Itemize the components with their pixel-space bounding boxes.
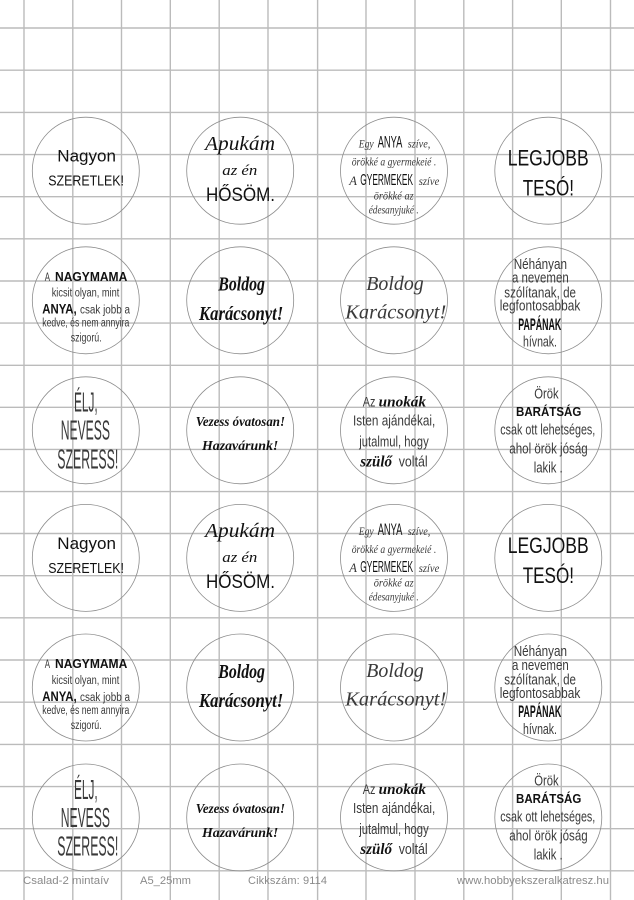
badge: Az unokák: szülő	[359, 454, 393, 471]
repeat badge: Apukám az én hősöm: HŐSÖM.	[206, 571, 275, 593]
badge: Néhányan a nevemen: Néhányan	[514, 256, 567, 273]
repeat badge: Egy anya szíve: ANYA	[378, 520, 403, 539]
repeat badge: A nagymama: NAGYMAMA	[55, 656, 128, 671]
badge: Néhányan a nevemen: legfontosabbak	[500, 298, 581, 315]
badge: Legjobb tesó: TESÓ!	[523, 176, 574, 201]
badge: Egy anya szíve: ANYA	[378, 133, 403, 152]
repeat badge: Egy anya szíve: örökké az	[374, 576, 414, 590]
repeat badge: Boldog Karácsonyt (brush): Boldog	[218, 661, 265, 683]
badge: Legjobb tesó	[495, 117, 602, 224]
repeat badge: A nagymama: szigorú.	[71, 720, 102, 732]
badge: Egy anya szíve	[340, 117, 448, 224]
repeat badge: A nagymama: A	[45, 657, 50, 671]
badge: Egy anya szíve: örökké a gyermekeié .	[352, 155, 436, 169]
badge: Néhányan a nevemen: szólítanak, de	[504, 284, 576, 301]
badge: Egy anya szíve: örökké az	[374, 188, 414, 202]
footer text: A5_25mm	[140, 875, 191, 887]
badge: Élj, nevess, szeress: NEVESS	[61, 415, 110, 446]
repeat badge: Egy anya szíve	[340, 504, 448, 611]
badge: Egy anya szíve: Egy	[358, 137, 374, 151]
badge: A nagymama: kedve, és nem annyira	[42, 318, 130, 330]
repeat badge: Néhányan a nevemen: PAPÁNAK	[518, 702, 562, 721]
badge: A nagymama: NAGYMAMA	[55, 269, 128, 284]
repeat badge: Legjobb tesó: LEGJOBB	[508, 533, 589, 558]
badge: Apukám az én hősöm	[187, 117, 294, 224]
repeat badge: Egy anya szíve: szíve	[419, 561, 440, 575]
badge: Néhányan a nevemen: hívnak.	[523, 334, 557, 351]
badge: Egy anya szíve: GYERMEKEK	[360, 172, 413, 189]
repeat badge: Egy anya szíve: édesanyjuké .	[369, 590, 419, 604]
repeat badge: Egy anya szíve: szíve,	[408, 524, 430, 538]
badge: Az unokák	[340, 377, 448, 484]
badge: Nagyon szeretlek	[32, 117, 139, 224]
repeat badge: Örök barátság: BARÁTSÁG	[516, 791, 581, 806]
badge: A nagymama: csak jobb a	[80, 305, 131, 317]
repeat badge: Néhányan a nevemen	[495, 634, 602, 741]
repeat badge: Néhányan a nevemen: a nevemen	[512, 657, 569, 674]
repeat badge: Az unokák: unokák	[379, 782, 427, 798]
badge: Az unokák: Az	[363, 394, 375, 410]
repeat badge: Boldog Karácsonyt (script)	[340, 634, 448, 741]
badge: Vezess óvatosan: Vezess óvatosan!	[196, 415, 285, 430]
badge: Élj, nevess, szeress: ÉLJ,	[74, 387, 98, 418]
repeat badge: Egy anya szíve: A	[348, 560, 357, 575]
repeat badge: Nagyon szeretlek	[32, 504, 139, 611]
repeat badge: Örök barátság	[495, 764, 602, 871]
badge: Az unokák: unokák	[379, 395, 427, 411]
repeat badge: Az unokák: voltál	[399, 841, 428, 858]
repeat badge: Az unokák: szülő	[359, 841, 393, 858]
badge: Vezess óvatosan: Hazavárunk!	[201, 439, 278, 454]
badge: Boldog Karácsonyt (brush): Karácsonyt!	[198, 303, 283, 325]
badge: Apukám az én hősöm: az én	[222, 163, 257, 179]
repeat badge: Az unokák: Az	[363, 781, 375, 797]
repeat badge: Örök barátság: csak ott lehetséges,	[500, 808, 595, 826]
repeat badge: Boldog Karácsonyt (brush): Karácsonyt!	[198, 690, 283, 712]
footer text: Csalad-2 mintaív	[23, 875, 110, 887]
badge: A nagymama: kicsit olyan, mint	[52, 288, 120, 300]
repeat badge: A nagymama: kicsit olyan, mint	[52, 675, 120, 687]
repeat badge: Apukám az én hősöm: Apukám	[203, 520, 275, 542]
badge: Boldog Karácsonyt (script)	[340, 247, 448, 354]
badge: Örök barátság: Örök	[534, 384, 559, 402]
repeat badge: A nagymama: csak jobb a	[80, 692, 131, 704]
repeat badge: Néhányan a nevemen: legfontosabbak	[500, 685, 581, 702]
badge: Legjobb tesó: LEGJOBB	[508, 146, 589, 171]
repeat badge: Egy anya szíve: örökké a gyermekeié .	[352, 542, 436, 556]
footer text: www.hobbyekszeralkatresz.hu	[456, 875, 609, 887]
repeat badge: A nagymama: kedve, és nem annyira	[42, 705, 130, 717]
repeat badge: Az unokák: Isten ajándékai,	[353, 800, 435, 817]
badge: Boldog Karácsonyt (brush): Boldog	[218, 274, 265, 296]
repeat badge: Vezess óvatosan: Vezess óvatosan!	[196, 802, 285, 817]
repeat badge: Vezess óvatosan: Hazavárunk!	[201, 826, 278, 841]
footer text	[23, 875, 609, 887]
badge: Élj, nevess, szeress: SZERESS!	[57, 443, 118, 474]
badge: Apukám az én hősöm: Apukám	[203, 133, 275, 155]
badge: Örök barátság: csak ott lehetséges,	[500, 421, 595, 438]
badge: Boldog Karácsonyt (script): Boldog	[366, 273, 424, 295]
repeat badge: Örök barátság: lakik .	[534, 846, 563, 864]
repeat badge: Az unokák	[340, 764, 448, 871]
badge: A nagymama: A	[45, 270, 50, 284]
repeat badge: Néhányan a nevemen: Néhányan	[514, 643, 567, 660]
badge: Vezess óvatosan	[187, 377, 294, 484]
repeat badge: Néhányan a nevemen: szólítanak, de	[504, 672, 576, 688]
badge: Egy anya szíve: szíve,	[408, 137, 430, 151]
repeat badge: Élj, nevess, szeress: NEVESS	[61, 802, 110, 833]
repeat badge: A nagymama	[32, 634, 139, 741]
badge: A nagymama: ANYA,	[42, 302, 77, 317]
badge: Egy anya szíve: szíve	[419, 174, 440, 188]
badge: Néhányan a nevemen	[495, 247, 602, 354]
badge: Az unokák: Isten ajándékai,	[353, 413, 435, 430]
repeat badge: Boldog Karácsonyt (brush)	[187, 634, 294, 741]
badge: Boldog Karácsonyt (brush)	[187, 247, 294, 354]
badge: Boldog Karácsonyt (script): Karácsonyt!	[344, 301, 446, 323]
badge: Örök barátság: ahol örök jóság	[509, 440, 588, 457]
badge: Örök barátság: BARÁTSÁG	[516, 404, 581, 419]
repeat badge: Élj, nevess, szeress	[32, 764, 139, 871]
badge: Egy anya szíve: A	[348, 173, 357, 188]
repeat badge: A nagymama: ANYA,	[42, 689, 77, 704]
repeat badge: Néhányan a nevemen: hívnak.	[523, 721, 557, 738]
badge: Apukám az én hősöm: HŐSÖM.	[206, 184, 275, 206]
repeat badge: Boldog Karácsonyt (script): Karácsonyt!	[344, 688, 446, 710]
badge: Élj, nevess, szeress	[32, 377, 139, 484]
badge: Nagyon szeretlek: SZERETLEK!	[48, 174, 124, 190]
repeat badge: Legjobb tesó	[495, 504, 602, 611]
badge: A nagymama	[32, 247, 139, 354]
badge: Néhányan a nevemen: PAPÁNAK	[518, 315, 562, 334]
badge: Egy anya szíve: édesanyjuké .	[369, 202, 419, 216]
repeat badge: Örök barátság: ahol örök jóság	[509, 828, 588, 844]
repeat badge: Nagyon szeretlek: Nagyon	[57, 534, 116, 553]
repeat badge: Örök barátság: Örök	[534, 772, 559, 790]
repeat badge: Legjobb tesó: TESÓ!	[523, 563, 574, 588]
badge: A nagymama: szigorú.	[71, 333, 102, 345]
badge: Néhányan a nevemen: a nevemen	[512, 270, 569, 287]
repeat badge: Vezess óvatosan	[187, 764, 294, 871]
repeat badge: Az unokák: jutalmul, hogy	[359, 821, 429, 838]
repeat badge: Élj, nevess, szeress: ÉLJ,	[74, 774, 98, 805]
badge: Az unokák: jutalmul, hogy	[359, 434, 429, 451]
footer text: Cikkszám: 9114	[248, 875, 327, 887]
badge: Az unokák: voltál	[399, 454, 428, 471]
repeat badge: Apukám az én hősöm	[187, 504, 294, 611]
repeat badge: Apukám az én hősöm: az én	[222, 550, 257, 566]
repeat badge: Élj, nevess, szeress: SZERESS!	[57, 830, 118, 862]
repeat badge: Egy anya szíve: Egy	[358, 524, 374, 538]
repeat badge: Nagyon szeretlek: SZERETLEK!	[48, 561, 124, 577]
badge: Örök barátság: lakik .	[534, 459, 563, 476]
badge: Nagyon szeretlek: Nagyon	[57, 147, 116, 166]
repeat badge: Egy anya szíve: GYERMEKEK	[360, 559, 413, 576]
repeat badge: Boldog Karácsonyt (script): Boldog	[366, 660, 424, 682]
badge: Örök barátság	[495, 377, 602, 484]
